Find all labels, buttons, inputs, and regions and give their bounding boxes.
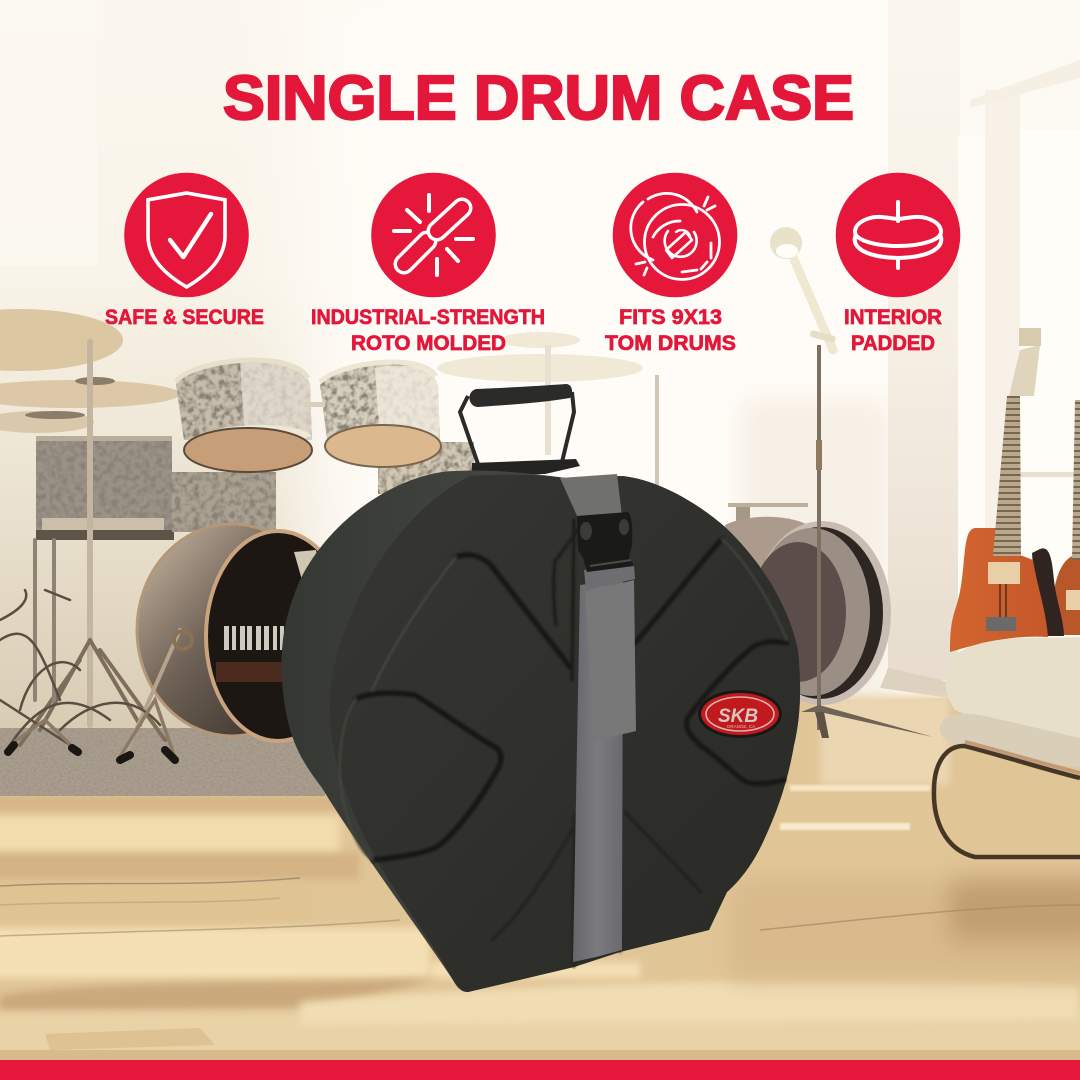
floor with wood bands (0, 695, 1080, 1060)
label: fits 9x13 tom drums: FITS 9X13 (619, 306, 722, 329)
label: industrial-strength roto molded (311, 306, 545, 355)
SKB badge (698, 690, 782, 738)
background: rug (0, 728, 325, 796)
label: fits 9x13 tom drums: TOM DRUMS (605, 332, 736, 355)
case moulded ridges (340, 520, 787, 967)
label: industrial-strength roto molded: INDUSTRIAL-STRENGTH (311, 306, 545, 329)
label: interior padded: INTERIOR (844, 306, 942, 329)
background: kick drum (137, 524, 350, 741)
SKB badge: ORANGE, CA (727, 724, 755, 729)
bottom red bar (0, 1060, 1080, 1080)
background: high toms (176, 359, 441, 472)
feature: industrial-strength roto molded (311, 173, 545, 355)
case front face (330, 475, 800, 992)
background: hardware stands (0, 342, 192, 760)
label: fits 9x13 tom drums (605, 306, 736, 355)
background: rear tom (172, 442, 474, 532)
feature: fits 9x13 tom drums (605, 173, 737, 355)
feature: interior padded (836, 173, 960, 355)
case buckle (577, 512, 634, 572)
case body (282, 471, 800, 992)
icon: chain link breaking (371, 173, 496, 297)
case straps (560, 474, 636, 962)
icon: crash cymbals (613, 173, 737, 297)
background: floor tom (36, 436, 174, 540)
SKB badge: SKB (718, 706, 758, 727)
icon: hi-hat cymbals (836, 173, 960, 297)
title: SINGLE DRUM CASE (223, 64, 854, 133)
background: cymbals (0, 309, 659, 485)
feature: safe and secure (105, 173, 264, 329)
label: industrial-strength roto molded: ROTO MOLDED (351, 332, 506, 355)
product: SKB drum case (282, 384, 800, 992)
background: sofa (934, 637, 1080, 857)
background: rear bass drum and mic stand (725, 227, 933, 738)
label: interior padded (844, 306, 942, 355)
case handle (460, 384, 580, 482)
background: guitars (950, 328, 1080, 652)
label: safe and secure: SAFE & SECURE (105, 306, 264, 329)
icon: shield with check mark (124, 173, 249, 297)
label: interior padded: PADDED (851, 332, 935, 355)
